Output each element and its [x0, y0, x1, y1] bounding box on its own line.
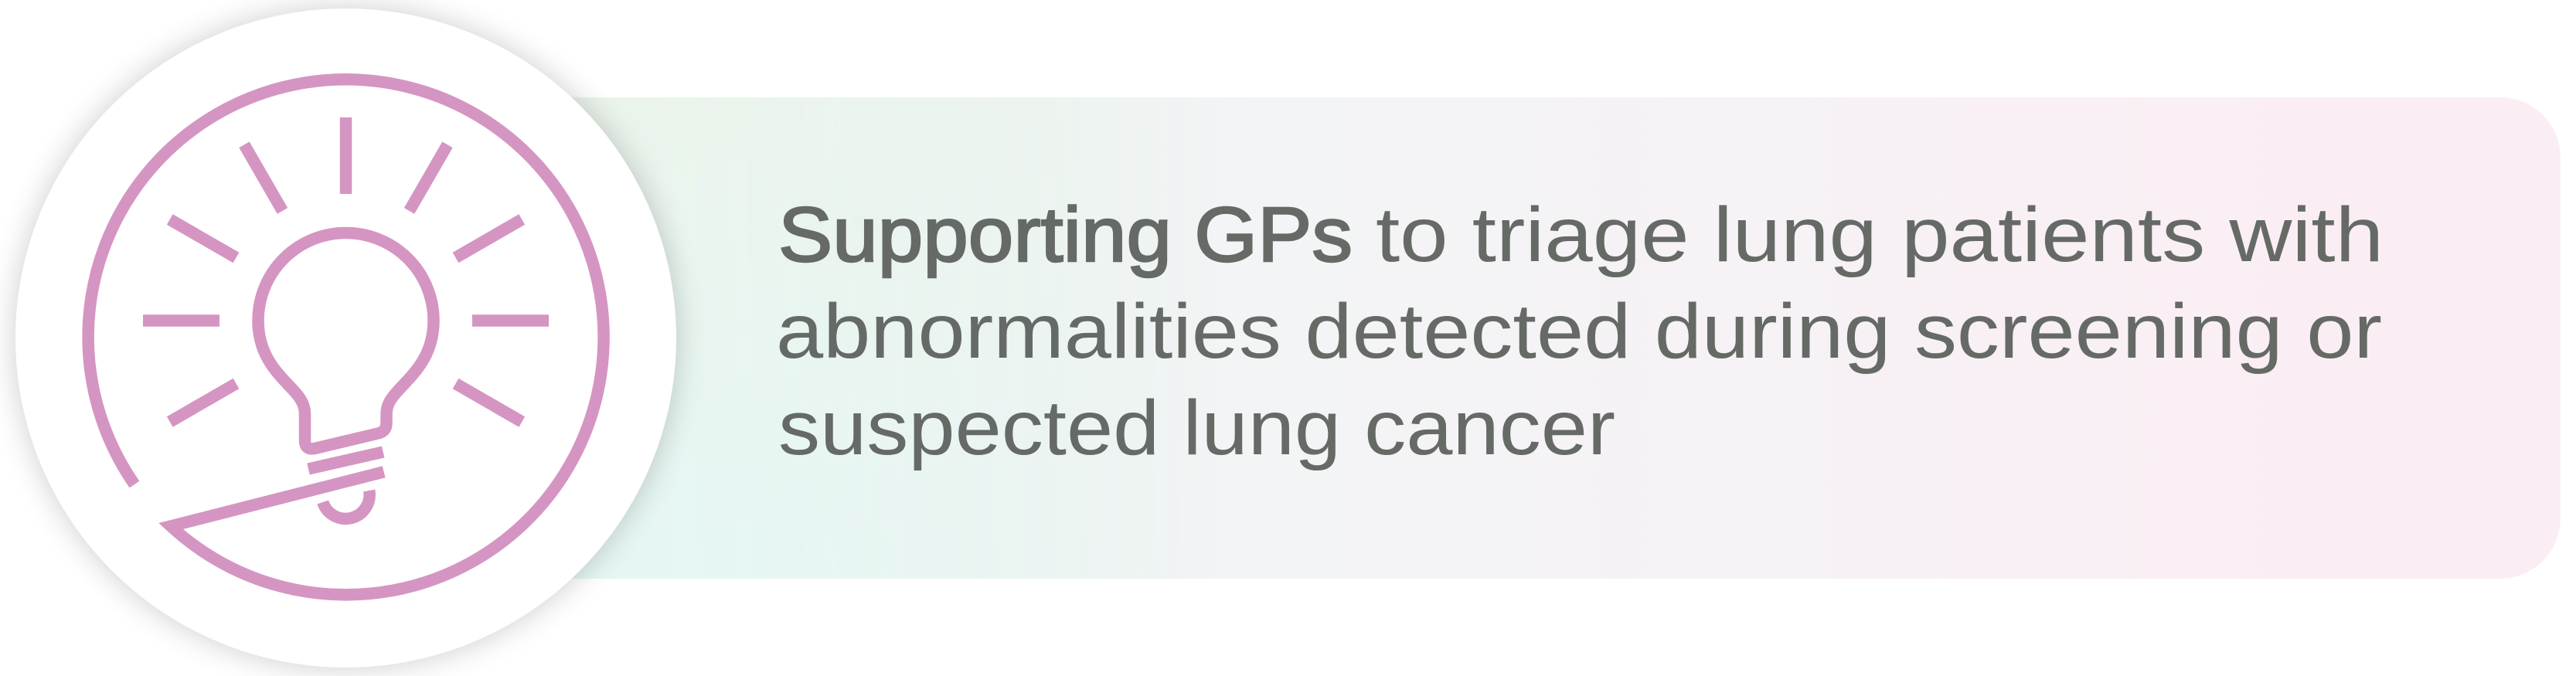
- icon: outer ring with base line: [88, 80, 604, 595]
- heading: bold lead-in: Supporting GPs: [778, 192, 1353, 278]
- text block: description: [776, 192, 2384, 471]
- panel: gradient background: [386, 97, 2561, 579]
- icon: light rays: [143, 117, 549, 422]
- icon: bulb outline: [258, 233, 434, 449]
- text: line one remainder: to triage lung patients with: [1376, 192, 2384, 278]
- text: line two: abnormalities detected during screening or: [776, 288, 2382, 375]
- icon: bulb screw line: [308, 452, 383, 469]
- icon: light bulb in circle: [88, 80, 604, 595]
- icon: bulb tip: [323, 491, 369, 518]
- panel: white circle with shadow: [15, 8, 676, 668]
- text: line three: suspected lung cancer: [778, 385, 1615, 471]
